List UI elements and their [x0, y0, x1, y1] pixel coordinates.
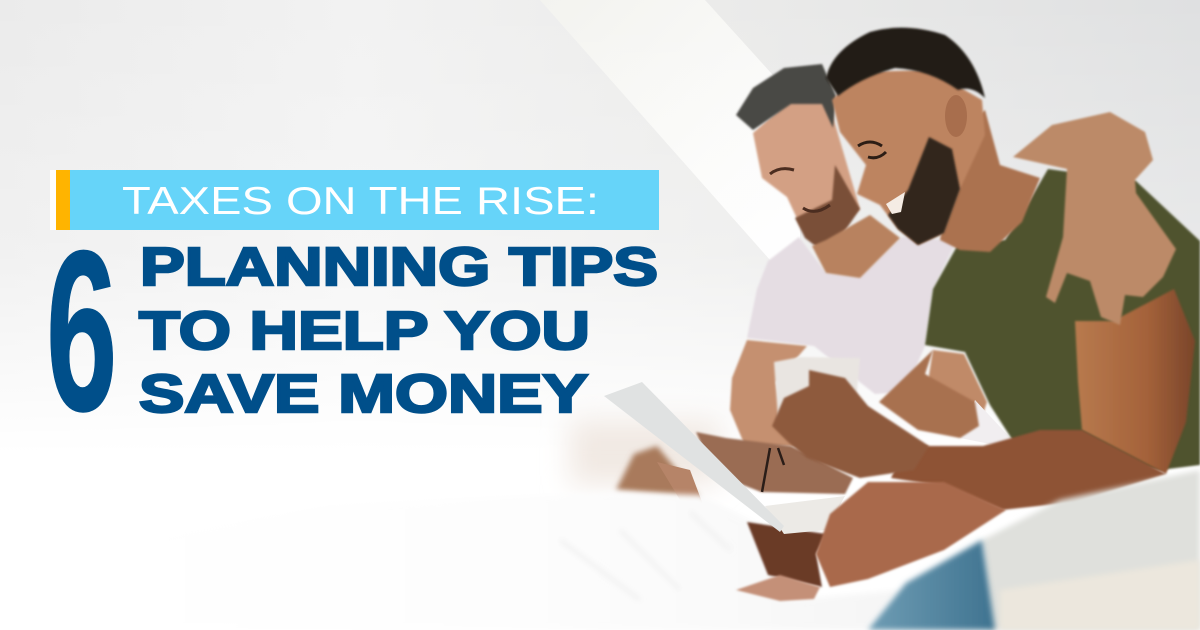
heading — [139, 237, 658, 424]
bracelet — [762, 448, 784, 492]
crossed lower leg — [747, 522, 826, 587]
yellow accent — [56, 170, 70, 230]
green man: eye — [858, 142, 886, 158]
subtitle: TAXES ON THE RISE: — [122, 180, 599, 223]
foreground blanket blue — [868, 540, 995, 630]
white man: beard — [795, 165, 860, 248]
green man: face — [832, 70, 985, 245]
heading line 1: PLANNING TIPS — [140, 237, 658, 297]
white man: smile and eye — [770, 169, 830, 211]
green man: shirt — [925, 169, 1200, 470]
large numeral 6: 6 — [46, 204, 117, 459]
heading line 2: TO HELP YOU — [139, 301, 590, 361]
green man: beard — [888, 137, 960, 245]
green man: hand on mug — [772, 370, 929, 478]
green man: upper arm — [1075, 289, 1195, 474]
green man: neck — [940, 110, 1040, 252]
white man: arm — [730, 340, 807, 446]
window light band — [540, 0, 800, 260]
knee — [816, 482, 1006, 587]
left bedding blur — [570, 420, 720, 485]
green man: ear — [945, 95, 967, 137]
white man: tablet arm — [696, 432, 853, 494]
left knee — [616, 446, 700, 498]
white man: fingers behind tablet — [657, 462, 705, 510]
foreground blanket grey — [982, 470, 1200, 630]
blue bar — [70, 170, 659, 230]
green man: smile — [886, 192, 905, 214]
green man: forearm — [891, 430, 1166, 510]
heading line 3: SAVE MONEY — [139, 364, 588, 424]
white man: hand on arm — [879, 350, 979, 438]
green man: hair — [826, 28, 985, 98]
foreground blanket cream — [1000, 560, 1200, 630]
foot — [736, 575, 820, 601]
white man: face fill — [753, 100, 860, 246]
mug — [774, 357, 860, 426]
white man: torso — [747, 237, 956, 394]
white man: back forearm — [925, 350, 987, 438]
bed sheets — [0, 492, 900, 630]
tablet screen — [604, 382, 784, 532]
white sliver shirt — [960, 400, 1016, 444]
tablet base — [765, 496, 845, 534]
white man: arm over shoulder — [1013, 112, 1176, 325]
title bar — [50, 170, 659, 230]
sheet folds — [560, 512, 730, 600]
white man: neck — [812, 215, 900, 278]
white man: hair — [736, 64, 836, 130]
white edge — [50, 170, 56, 230]
